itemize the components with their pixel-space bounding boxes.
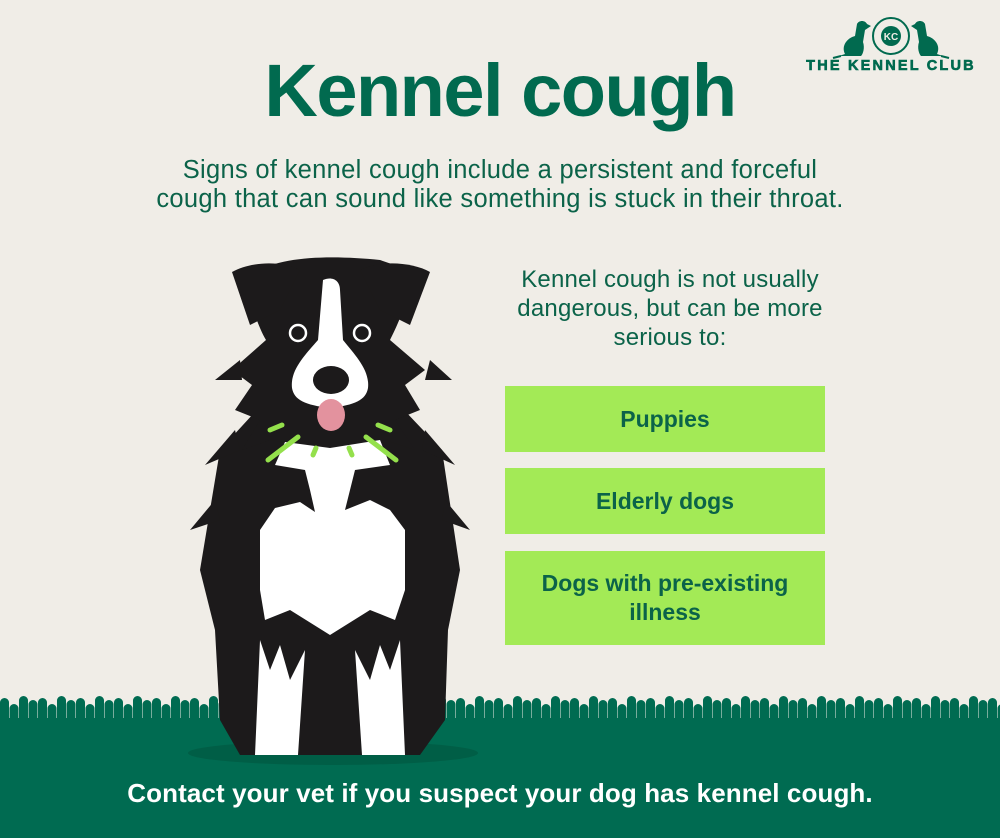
body bbox=[200, 390, 460, 755]
icon: right dog bbox=[911, 21, 949, 58]
text: risk intro: Kennel cough is not usually bbox=[521, 266, 819, 293]
box: puppies: Puppies bbox=[620, 406, 710, 432]
box: pre-existing illness bbox=[505, 551, 825, 645]
subtitle: Signs of kennel cough include a persistent and forceful bbox=[183, 156, 817, 184]
head bbox=[232, 257, 425, 450]
ears bbox=[232, 263, 300, 325]
chest white bbox=[260, 440, 405, 635]
title: Kennel cough bbox=[264, 49, 736, 132]
logo: The Kennel Club bbox=[806, 17, 976, 74]
nose bbox=[313, 366, 349, 394]
fur spikes bbox=[190, 360, 470, 530]
logo: The Kennel Club: THE KENNEL CLUB bbox=[806, 58, 976, 74]
white legs bbox=[255, 640, 305, 755]
icon: KC badge: KC bbox=[884, 32, 898, 43]
footer message: Contact your vet if you suspect your dog has kennel cough. bbox=[127, 778, 873, 808]
cough lines bbox=[268, 425, 396, 460]
icon: left dog bbox=[833, 21, 871, 58]
icon: KC badge bbox=[873, 18, 909, 54]
subtitle bbox=[156, 156, 844, 213]
illustration: dog bbox=[190, 257, 470, 755]
box: elderly dogs: Elderly dogs bbox=[596, 488, 734, 514]
text: risk intro bbox=[517, 266, 823, 351]
white blaze and muzzle bbox=[292, 278, 368, 408]
box: elderly dogs bbox=[505, 468, 825, 534]
tongue bbox=[317, 399, 345, 431]
subtitle: cough that can sound like something is stuck in their throat. bbox=[156, 185, 844, 213]
box: pre-existing illness: illness bbox=[629, 599, 701, 625]
text: risk intro: serious to: bbox=[614, 324, 726, 351]
eyes bbox=[290, 325, 370, 341]
box: pre-existing illness: Dogs with pre-existing bbox=[542, 570, 788, 596]
grass ground bbox=[0, 696, 1000, 838]
text: risk intro: dangerous, but can be more bbox=[517, 295, 823, 322]
box: puppies bbox=[505, 386, 825, 452]
